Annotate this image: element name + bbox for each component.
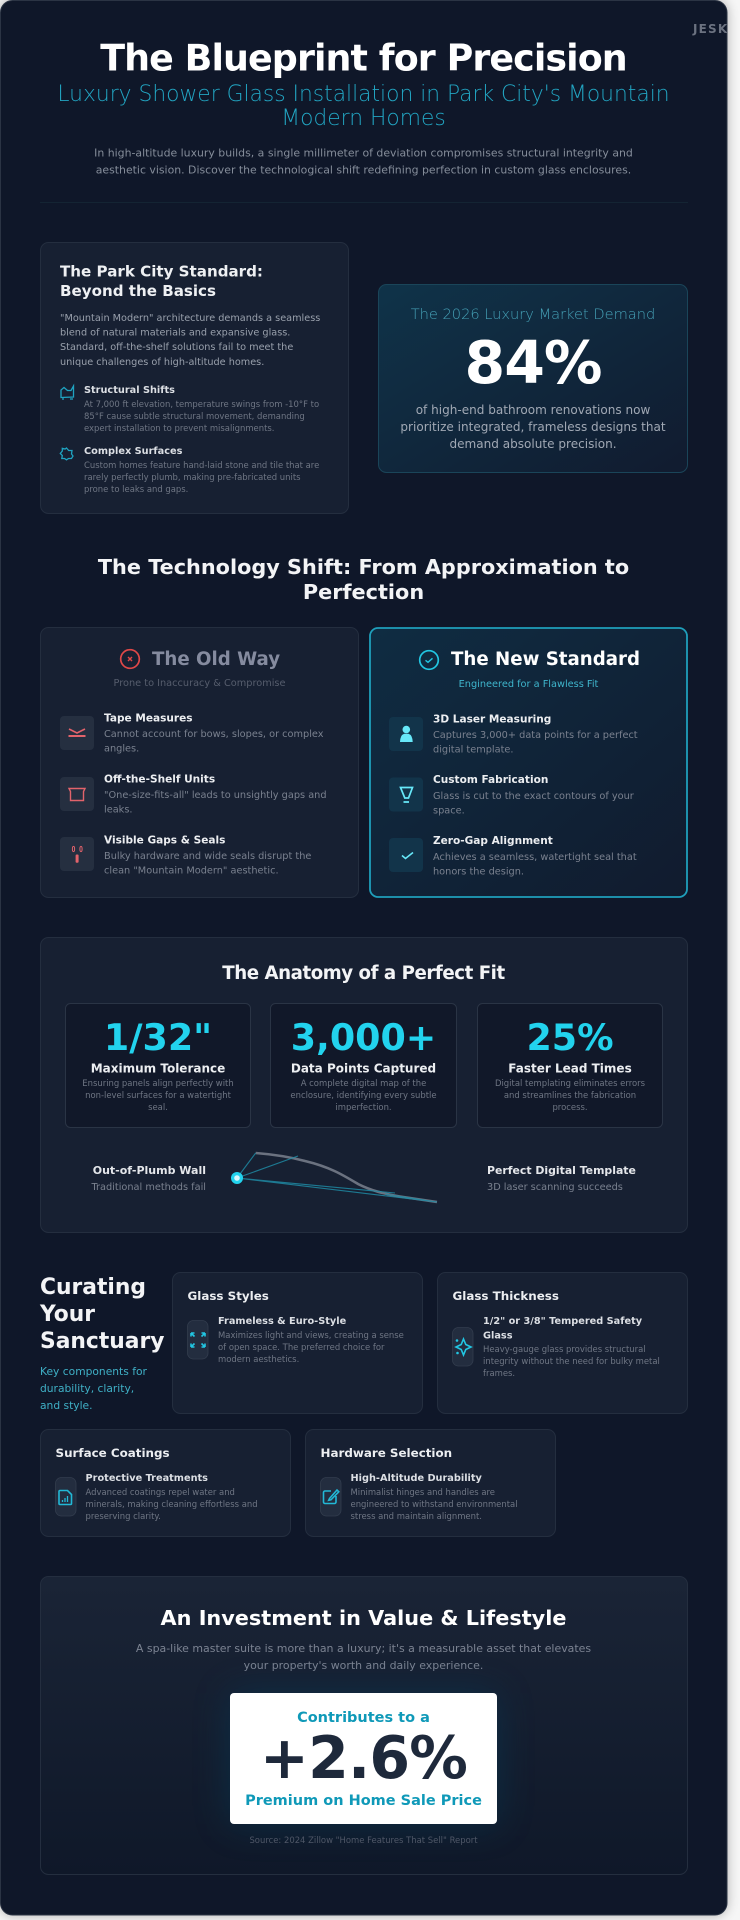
- card: surface coatings: Advanced coatings repel water and: [86, 1487, 235, 1497]
- header: [57, 37, 670, 176]
- card: glass thickness: frames.: [483, 1368, 515, 1378]
- section intro: curating your sanctuary: Curating: [40, 1275, 146, 1300]
- section heading: technology shift: Perfection: [303, 580, 424, 604]
- card: surface coatings: minerals, making cleaning effortless and: [86, 1499, 258, 1509]
- card: hardware selection: High-Altitude Durability: [350, 1473, 483, 1484]
- item: off-the-shelf units: [60, 774, 327, 816]
- section intro: curating your sanctuary: and style.: [40, 1399, 93, 1412]
- brand mark: JESK: [692, 22, 728, 36]
- caption: demand absolute precision.: [449, 437, 617, 451]
- paragraph: "Mountain Modern" architecture demands a seamless: [60, 313, 320, 324]
- panel: investment in value and lifestyle: [40, 1576, 688, 1874]
- item: zero-gap alignment: honors the design.: [433, 866, 524, 878]
- stat: faster lead times: and streamlines the fabrication: [504, 1090, 636, 1100]
- item: 3D laser measuring: digital template.: [433, 745, 514, 756]
- callout: value premium: Contributes to a: [297, 1710, 430, 1726]
- subtitle: Modern Homes: [281, 106, 446, 131]
- stat: maximum tolerance: [66, 1004, 250, 1128]
- caption: of high-end bathroom renovations now: [416, 403, 650, 417]
- item: tape measures: Cannot account for bows, slopes, or complex: [104, 729, 324, 740]
- icon: document chart: [56, 1478, 76, 1516]
- card: glass styles: modern aesthetics.: [218, 1354, 299, 1364]
- item: off-the-shelf units: "One-size-fits-all" leads to unsightly gaps and: [104, 790, 327, 801]
- diagram: laser scan of wall: [231, 1153, 437, 1202]
- stat: data points captured: enclosure, identifying every subtle: [290, 1090, 437, 1100]
- card: surface coatings: [40, 1430, 290, 1536]
- label: perfect digital template: [487, 1164, 636, 1193]
- item: visible gaps and seals: clean "Mountain Modern" aesthetic.: [104, 866, 279, 877]
- item: visible gaps and seals: Bulky hardware and wide seals disrupt the: [104, 851, 311, 862]
- heading: The Anatomy of a Perfect Fit: [222, 963, 505, 984]
- label: out-of-plumb wall: [90, 1164, 206, 1193]
- stat: faster lead times: 25%: [526, 1016, 614, 1059]
- callout: value premium: Premium on Home Sale Price: [245, 1793, 482, 1809]
- card: glass thickness: Glass: [483, 1331, 513, 1342]
- item: structural shifts: At 7,000 ft elevation, temperature swings from -10°F to: [84, 399, 319, 409]
- item: zero-gap alignment: [389, 835, 637, 878]
- card: hardware selection: [306, 1430, 556, 1536]
- panel: the new standard: [370, 628, 687, 897]
- item: complex surfaces: [84, 446, 319, 494]
- item: complex surfaces: Complex Surfaces: [84, 446, 183, 457]
- item: off-the-shelf units: leaks.: [104, 805, 133, 816]
- card: glass styles: of open space. The preferred choice for: [218, 1342, 385, 1352]
- item: complex surfaces: prone to leaks and gaps.: [84, 484, 188, 494]
- heading: The New Standard: [451, 649, 640, 670]
- card: hardware selection: Hardware Selection: [320, 1446, 452, 1460]
- paragraph: your property's worth and daily experience.: [244, 1659, 483, 1672]
- section intro: curating your sanctuary: Key components for: [40, 1365, 148, 1378]
- icon: sparkle: [452, 1328, 473, 1366]
- stat: faster lead times: process.: [552, 1102, 588, 1112]
- item: custom fabrication: space.: [433, 806, 465, 816]
- card: hardware selection: engineered to withstand environmental: [350, 1499, 518, 1509]
- stat: faster lead times: Faster Lead Times: [508, 1062, 632, 1076]
- heading: The Park City Standard:: [60, 263, 263, 281]
- stat: data points captured: 3,000+: [291, 1016, 436, 1059]
- intro text: In high-altitude luxury builds, a single millimeter of deviation compromises structural integrity and: [94, 147, 633, 160]
- label: out-of-plumb wall: Out-of-Plumb Wall: [93, 1164, 206, 1177]
- item: tape measures: Tape Measures: [104, 713, 193, 725]
- stat: maximum tolerance: seal.: [148, 1102, 168, 1112]
- icon: expand arrows: [188, 1320, 208, 1359]
- card: surface coatings: Protective Treatments: [86, 1473, 208, 1484]
- label: perfect digital template: Perfect Digital Template: [487, 1164, 636, 1177]
- paragraph: blend of natural materials and expansive glass.: [60, 328, 290, 339]
- item: 3D laser measuring: [389, 713, 638, 756]
- section intro: curating your sanctuary: [39, 1275, 164, 1412]
- card: glass styles: [172, 1272, 422, 1414]
- subtitle: Luxury Shower Glass Installation in Park City's Mountain: [57, 82, 670, 107]
- item: tape measures: angles.: [104, 744, 139, 755]
- item: zero-gap alignment: Achieves a seamless, watertight seal that: [433, 852, 637, 863]
- card: glass thickness: 1/2" or 3/8" Tempered Safety: [483, 1316, 643, 1327]
- panel: Park City Standard: [40, 242, 348, 514]
- label: perfect digital template: 3D laser scanning succeeds: [487, 1182, 623, 1193]
- paragraph: Standard, off-the-shelf solutions fail to meet the: [60, 342, 293, 353]
- icon: pencil square: [320, 1478, 341, 1516]
- label: out-of-plumb wall: Traditional methods fail: [90, 1182, 206, 1193]
- stat: faster lead times: [478, 1004, 662, 1128]
- card: glass styles: Maximizes light and views, creating a sense: [218, 1330, 404, 1340]
- item: 3D laser measuring: Captures 3,000+ data points for a perfect: [433, 730, 638, 741]
- panel: 2026 market demand: [378, 284, 688, 472]
- item: structural shifts: Structural Shifts: [84, 385, 175, 396]
- card: surface coatings: Surface Coatings: [56, 1446, 170, 1460]
- source note: Source: 2024 Zillow "Home Features That Sell" Report: [249, 1835, 478, 1845]
- card: glass styles: Frameless & Euro-Style: [218, 1316, 347, 1327]
- item: structural shifts: 85°F cause subtle structural movement, demanding: [84, 411, 305, 421]
- card: glass thickness: Heavy-gauge glass provides structural: [483, 1344, 646, 1354]
- stat: data points captured: A complete digital map of the: [301, 1078, 426, 1088]
- item: complex surfaces: Custom homes feature hand-laid stone and tile that are: [84, 460, 319, 470]
- section intro: curating your sanctuary: Sanctuary: [40, 1329, 164, 1354]
- callout: value premium: [230, 1693, 497, 1824]
- item: visible gaps and seals: Visible Gaps & Seals: [104, 834, 225, 846]
- paragraph: unique challenges of high-altitude homes.: [60, 357, 264, 368]
- icon: structural shifts: [61, 386, 74, 399]
- stat: data points captured: Data Points Captured: [291, 1062, 436, 1076]
- stat: maximum tolerance: non-level surfaces for a watertight: [85, 1090, 232, 1100]
- item: complex surfaces: rarely perfectly plumb, making pre-fabricated units: [84, 472, 301, 482]
- stat: data points captured: [270, 1004, 456, 1128]
- stat: maximum tolerance: Maximum Tolerance: [91, 1062, 225, 1076]
- card: glass thickness: Glass Thickness: [452, 1289, 559, 1303]
- section heading: technology shift: The Technology Shift: From Approximation to: [98, 555, 629, 579]
- caption: prioritize integrated, frameless designs that: [400, 420, 666, 434]
- callout glow: [230, 1693, 497, 1824]
- card: hardware selection: Minimalist hinges and handles are: [350, 1487, 495, 1497]
- item: zero-gap alignment: Zero-Gap Alignment: [433, 835, 553, 847]
- heading: Beyond the Basics: [60, 282, 216, 300]
- icon: check circle: [420, 651, 438, 669]
- item: custom fabrication: Glass is cut to the exact contours of your: [433, 791, 635, 802]
- title: The Blueprint for Precision: [100, 37, 627, 80]
- stat: maximum tolerance: 1/32": [104, 1016, 212, 1059]
- item: custom fabrication: Custom Fabrication: [433, 774, 548, 786]
- item: structural shifts: [84, 385, 319, 433]
- card: glass styles: Glass Styles: [188, 1289, 269, 1303]
- intro text: aesthetic vision. Discover the technological shift redefining perfection in custom glass enclosures.: [96, 163, 631, 176]
- heading: The Old Way: [152, 649, 280, 670]
- callout: value premium: +2.6%: [260, 1724, 467, 1792]
- panel: anatomy of a perfect fit: [40, 938, 688, 1232]
- card: glass thickness: [438, 1272, 688, 1414]
- card: glass thickness: integrity without the need for bulky metal: [483, 1356, 660, 1366]
- panel: the old way: [40, 628, 358, 898]
- icon: complex surfaces: [60, 448, 73, 460]
- section intro: curating your sanctuary: durability, clarity,: [40, 1382, 134, 1395]
- item: structural shifts: expert installation to prevent misalignments.: [84, 423, 274, 433]
- section intro: curating your sanctuary: Your: [39, 1302, 95, 1327]
- item: custom fabrication: [389, 774, 635, 816]
- card: hardware selection: stress and maintain alignment.: [350, 1511, 482, 1521]
- subheading: Prone to Inaccuracy & Compromise: [114, 678, 285, 689]
- item: visible gaps and seals: [60, 834, 311, 877]
- label: The 2026 Luxury Market Demand: [411, 306, 655, 323]
- stat: data points captured: imperfection.: [335, 1102, 392, 1112]
- item: off-the-shelf units: Off-the-Shelf Units: [104, 774, 215, 786]
- item: 3D laser measuring: 3D Laser Measuring: [433, 713, 551, 725]
- card: surface coatings: preserving clarity.: [86, 1511, 161, 1521]
- stat: maximum tolerance: Ensuring panels align perfectly with: [82, 1078, 234, 1088]
- subheading: Engineered for a Flawless Fit: [459, 679, 599, 690]
- heading: An Investment in Value & Lifestyle: [161, 1606, 566, 1630]
- icon: x circle: [121, 650, 139, 668]
- item: tape measures: [60, 713, 324, 755]
- stat: faster lead times: Digital templating eliminates errors: [495, 1078, 645, 1088]
- big stat: 84%: [464, 329, 602, 397]
- paragraph: A spa-like master suite is more than a luxury; it's a measurable asset that elevates: [136, 1642, 591, 1655]
